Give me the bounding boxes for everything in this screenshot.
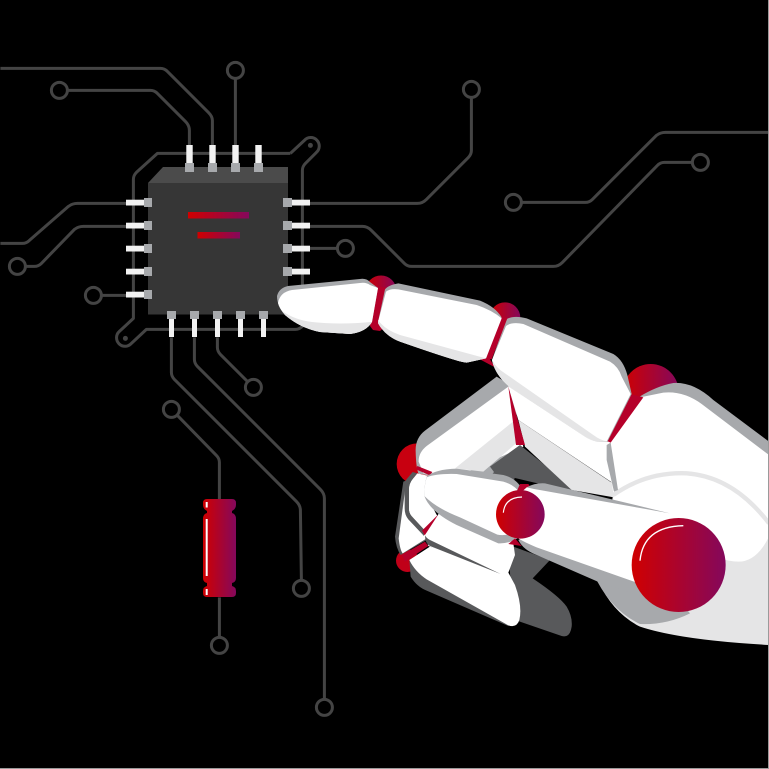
joint: fingertip knuckle	[366, 276, 396, 306]
joints	[396, 302, 679, 572]
thumb white	[518, 485, 680, 582]
palm crease	[613, 473, 769, 523]
palm top edge	[638, 383, 769, 493]
dark segment outline	[405, 472, 424, 536]
chip top bevel	[148, 167, 288, 183]
palm bridge shade	[518, 420, 614, 497]
palm crease grey stripe	[607, 443, 618, 492]
lowest curled finger	[409, 547, 520, 626]
top curled finger	[424, 469, 523, 543]
palm shape	[598, 493, 769, 645]
microchip	[126, 145, 310, 337]
resistor component	[203, 499, 236, 597]
dark palm wedge	[490, 445, 580, 493]
back finger white	[419, 387, 523, 477]
index distal segment	[378, 283, 502, 363]
chip pins	[126, 145, 310, 337]
thumb bottom shade	[518, 527, 647, 597]
red tendon	[508, 387, 525, 445]
red connector: tip to distal	[370, 286, 388, 328]
dark rear shadow	[480, 445, 572, 636]
back finger inner shade	[455, 420, 520, 472]
back finger grey	[416, 377, 520, 487]
chip red bars	[188, 212, 249, 238]
thumb top grey sliver	[527, 483, 670, 513]
thumb small joint	[496, 490, 545, 539]
palm bridge white	[508, 383, 613, 483]
red connector to palm	[606, 393, 643, 443]
robot hand	[378, 283, 769, 645]
fingertip joint	[366, 276, 396, 331]
palm shadow	[593, 560, 690, 624]
red connector between segments	[485, 315, 507, 359]
fingertip	[277, 279, 378, 334]
red thumb connectors	[517, 484, 533, 492]
trace terminals	[9, 62, 708, 715]
index middle segment	[492, 317, 632, 442]
middle curled finger	[425, 500, 515, 574]
white knuckle segment	[409, 473, 437, 529]
chip body	[148, 183, 288, 314]
joint: fingertip lower	[370, 318, 386, 331]
curled finger left column	[395, 466, 439, 562]
palm white	[607, 392, 769, 562]
thumb big joint	[632, 518, 726, 612]
thumb	[508, 483, 680, 597]
